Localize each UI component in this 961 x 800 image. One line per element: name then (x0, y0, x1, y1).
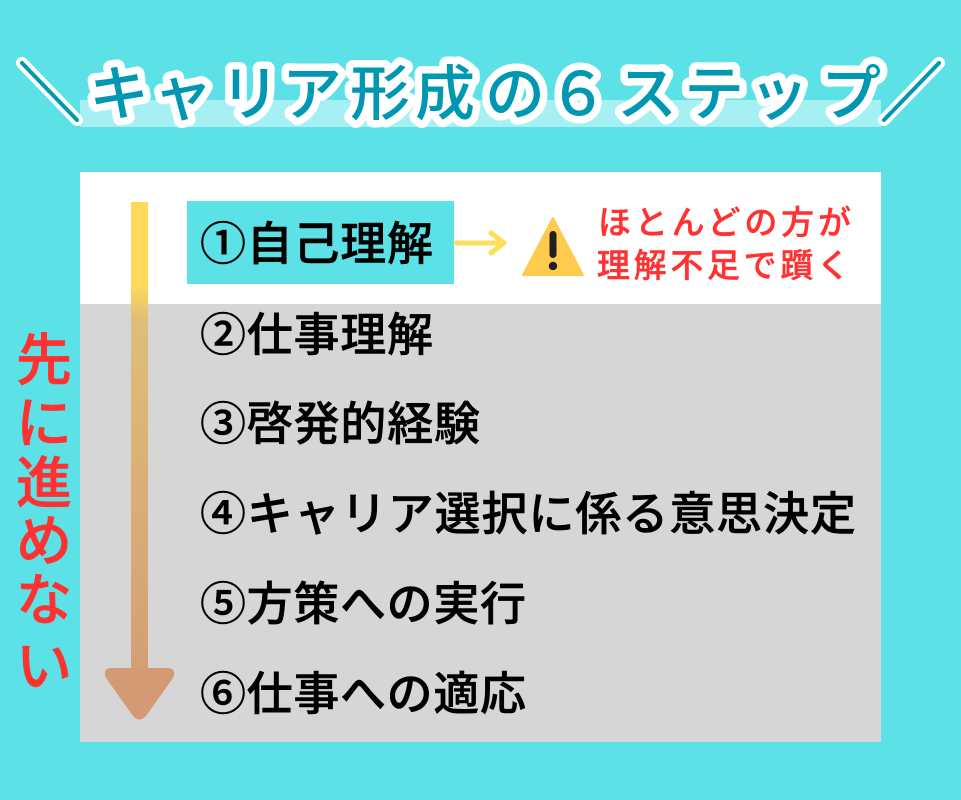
callout: most people stumble (597, 204, 851, 284)
step 1 highlight box (187, 201, 454, 284)
step 4: ④キャリア選択に係る意思決定 (200, 488, 856, 540)
title banner band (80, 100, 881, 127)
side label: cannot advance: め (16, 510, 72, 573)
side label: cannot advance: 進 (16, 452, 72, 515)
left title slash (22, 63, 77, 120)
callout line 2: 理解不足で躓く (597, 247, 850, 284)
step 3: ③啓発的経験 (200, 398, 480, 450)
step 5: ⑤方策への実行 (200, 578, 526, 630)
callout line 1: ほとんどの方が (598, 204, 851, 241)
side label: cannot advance: い (16, 635, 72, 698)
side label: cannot advance: に (16, 392, 72, 455)
panel: steps highlighted white area (80, 172, 881, 304)
step 6: ⑥仕事への適応 (200, 668, 526, 720)
icon: warning triangle (523, 218, 583, 275)
title: キャリア形成の６ステップ (89, 61, 881, 128)
vertical progress arrow (105, 202, 174, 720)
right title slash (884, 63, 939, 120)
side label: cannot advance: 先 (16, 329, 72, 392)
yellow arrow to warning (456, 233, 504, 253)
panel: steps greyed area (80, 304, 881, 742)
step 1 text: ①自己理解 (200, 218, 433, 270)
step 2: ②仕事理解 (200, 309, 433, 361)
side label: cannot advance: な (16, 569, 72, 632)
